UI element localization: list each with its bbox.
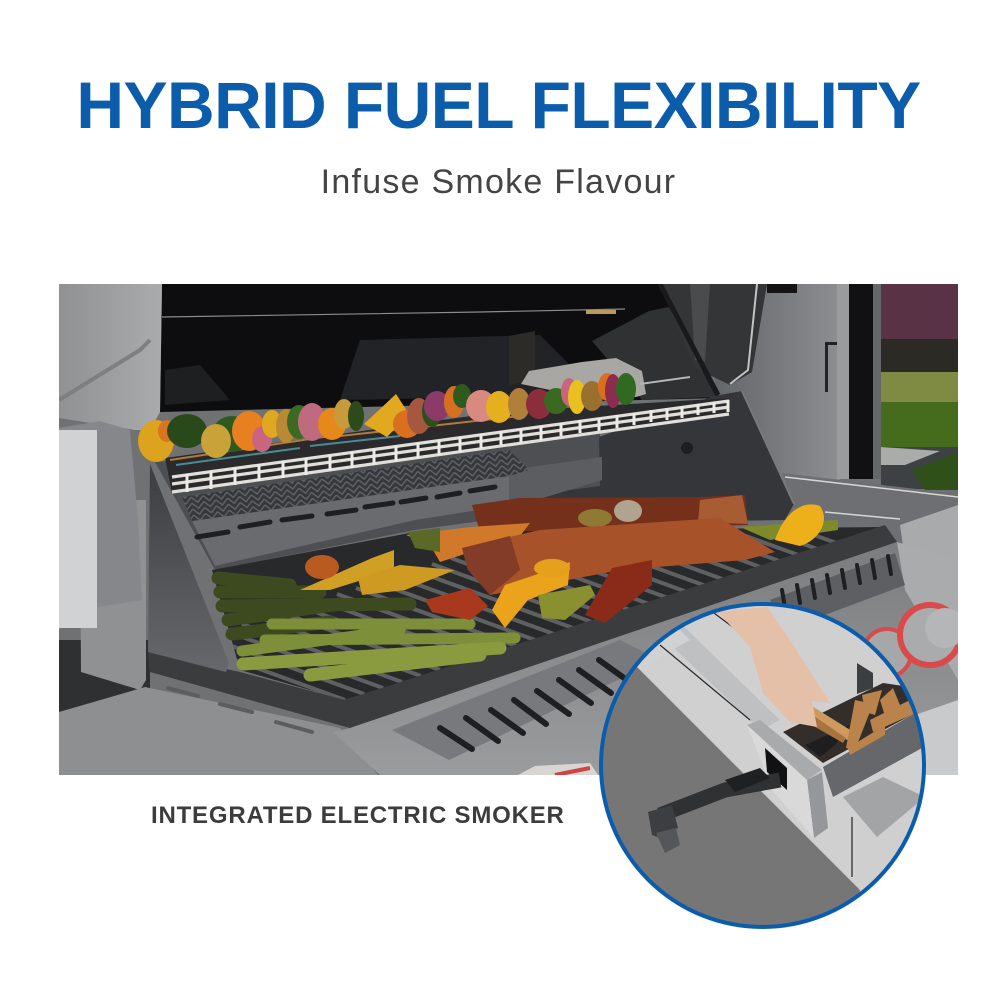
- hand: [718, 607, 830, 727]
- peppers: [300, 504, 824, 628]
- vegetable skewers: [138, 373, 636, 462]
- firebox right wall: [544, 391, 794, 521]
- pepper strip and green: [406, 520, 838, 562]
- smoker handle: [648, 768, 780, 853]
- burner knobs: [863, 605, 965, 677]
- chevron panel: [182, 450, 529, 521]
- left lid housing: [59, 284, 162, 430]
- main cooking grate: [212, 527, 878, 700]
- firebox back wall: [155, 430, 600, 570]
- front control panel: [333, 542, 958, 775]
- lid inner side panel: [592, 307, 716, 400]
- right side shelf: [782, 473, 916, 489]
- skewer pin: [640, 377, 690, 384]
- back panel with slots: [192, 457, 602, 566]
- background wall and door: [715, 284, 881, 484]
- grill photo: [59, 284, 965, 775]
- title: HYBRID FUEL FLEXIBILITY: [76, 68, 921, 142]
- front ribs: [462, 518, 775, 595]
- warming rack: [165, 398, 729, 493]
- smoker face plate: [747, 720, 828, 838]
- inset blue ring: [601, 604, 924, 927]
- open lid interior: [160, 284, 720, 412]
- smoker drawer: [783, 683, 925, 837]
- lid end cap: [660, 284, 767, 395]
- garden view: [881, 284, 958, 490]
- inset background: [595, 598, 930, 935]
- back ribs: [472, 495, 748, 532]
- foil packet: [521, 358, 646, 397]
- left stand: [59, 421, 150, 712]
- subtitle: Infuse Smoke Flavour: [321, 163, 676, 201]
- left side shelf: [59, 687, 378, 775]
- left firebox wall: [148, 464, 229, 672]
- wood chips: [807, 688, 916, 755]
- asparagus: [218, 578, 515, 675]
- caption: INTEGRATED ELECTRIC SMOKER: [151, 802, 565, 829]
- inset circle: smoker drawer: [595, 598, 930, 935]
- grill front rim: [148, 525, 897, 728]
